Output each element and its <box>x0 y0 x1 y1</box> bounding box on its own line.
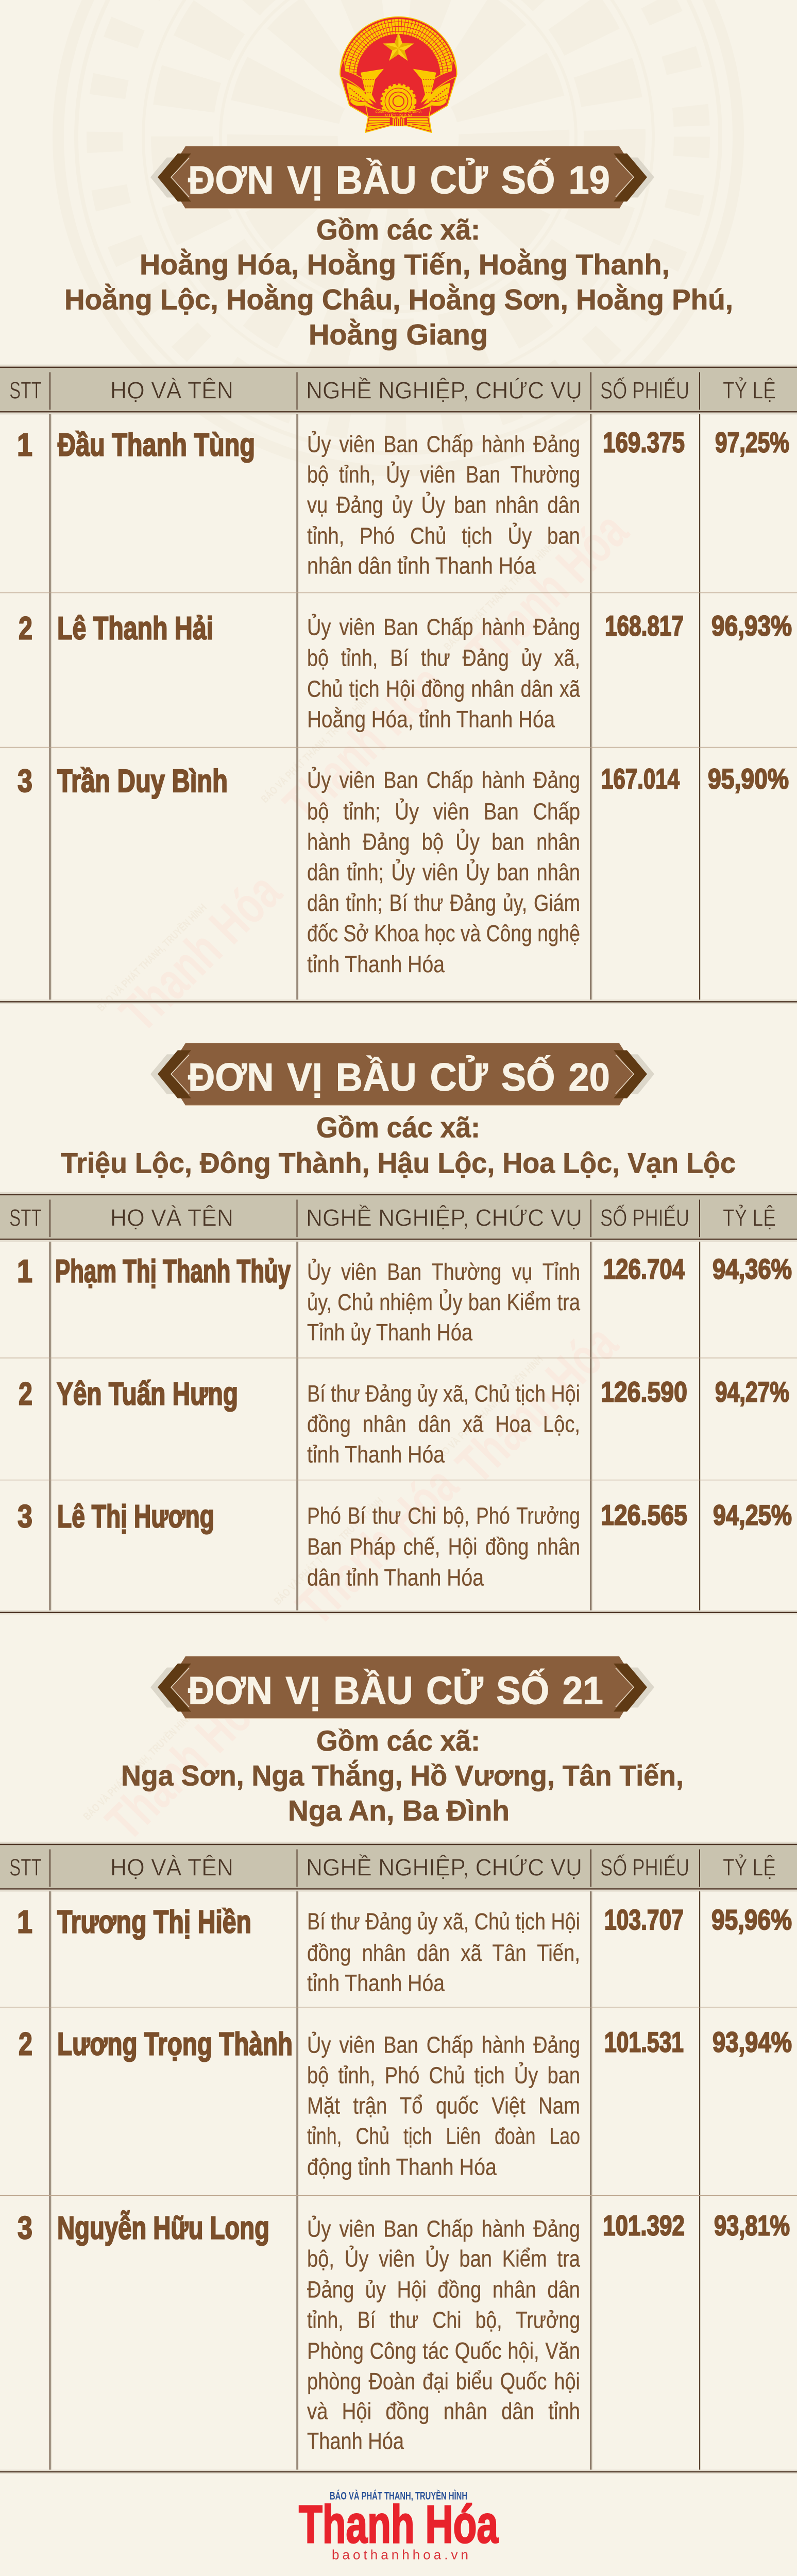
row: Phạm Thị Thanh Thủy: ủy, Chủ nhiệm Ủy ban Kiểm tra <box>307 1289 581 1315</box>
table header: NGHỀ NGHIỆP, CHỨC VỤ <box>306 1854 582 1881</box>
text block: communes of unit 19: Hoằng Hóa, Hoằng Tiến, Hoằng Thanh, <box>140 248 670 281</box>
table header: STT <box>9 1205 42 1231</box>
row: Phạm Thị Thanh Thủy: 1 <box>17 1253 32 1290</box>
row: Phạm Thị Thanh Thủy: Tỉnh ủy Thanh Hóa <box>307 1319 473 1346</box>
table header: STT <box>9 377 42 403</box>
text block: communes of unit 21 <box>121 1724 684 1826</box>
text block: communes of unit 19: Hoằng Giang <box>309 318 488 350</box>
text block: communes of unit 19: Gồm các xã: <box>316 213 480 246</box>
row: Lương Trọng Thành <box>19 2026 792 2180</box>
logo: Báo và Phát thanh, Truyền hình Thanh Hóa: baothanhhoa.vn <box>332 2548 468 2563</box>
table header: TỶ LỆ <box>723 377 776 403</box>
row: Lê Thị Hương: dân tỉnh Thanh Hóa <box>307 1565 484 1590</box>
banner: unit 19 title <box>150 146 654 209</box>
table header <box>0 365 797 415</box>
banner: unit 19 title: ĐƠN VỊ BẦU CỬ SỐ 19 <box>188 159 610 202</box>
row: Yên Tuấn Hưng: đồng nhân dân xã Hoa Lộc, <box>307 1411 580 1437</box>
icon: national emblem of Vietnam <box>340 17 457 132</box>
row: Đầu Thanh Tùng: Đầu Thanh Tùng <box>58 427 255 463</box>
row: Nguyễn Hữu Long: Phòng Công tác Quốc hội, Văn <box>307 2338 580 2364</box>
table: unit 21 results <box>0 1842 797 2473</box>
background: Thanh Hoa watermarks: Thanh Hóa <box>445 1314 629 1494</box>
table header: TỶ LỆ <box>723 1205 776 1231</box>
row: Yên Tuấn Hưng: tỉnh Thanh Hóa <box>307 1442 445 1468</box>
row: Đầu Thanh Tùng: vụ Đảng ủy Ủy ban nhân dân <box>307 492 580 518</box>
table header <box>0 1842 797 1892</box>
row: Đầu Thanh Tùng: nhân dân tỉnh Thanh Hóa <box>307 553 536 579</box>
banner: unit 21 title <box>150 1656 654 1719</box>
row: Nguyễn Hữu Long: tỉnh, Bí thư Chi bộ, Trưởng <box>307 2307 580 2333</box>
section: election unit 21 <box>0 1656 797 2473</box>
row: Yên Tuấn Hưng: Yên Tuấn Hưng <box>57 1376 238 1412</box>
row: Lê Thị Hương: 3 <box>18 1499 32 1534</box>
row: Trần Duy Bình: tỉnh Thanh Hóa <box>307 952 445 977</box>
text block: communes of unit 21: Gồm các xã: <box>316 1724 480 1757</box>
text block: communes of unit 20 <box>61 1111 736 1179</box>
row: Nguyễn Hữu Long: Nguyễn Hữu Long <box>57 2210 269 2246</box>
banner: unit 20 title: ĐƠN VỊ BẦU CỬ SỐ 20 <box>188 1056 610 1099</box>
row: Đầu Thanh Tùng: Ủy viên Ban Chấp hành Đảng <box>307 431 580 457</box>
row: Trần Duy Bình: bộ tỉnh; Ủy viên Ban Chấp <box>307 798 580 824</box>
banner: unit 20 title <box>150 1043 654 1106</box>
row: Trần Duy Bình: Trần Duy Bình <box>57 764 228 799</box>
row: Nguyễn Hữu Long: Thanh Hóa <box>307 2428 404 2454</box>
row: Lương Trọng Thành: Lương Trọng Thành <box>57 2026 293 2062</box>
text block: communes of unit 19: Hoằng Lộc, Hoằng Châu, Hoằng Sơn, Hoằng Phú, <box>64 283 733 315</box>
row: Lương Trọng Thành: 101.531 <box>604 2026 684 2058</box>
row: Đầu Thanh Tùng: tỉnh, Phó Chủ tịch Ủy ban <box>307 522 580 549</box>
row: Đầu Thanh Tùng: 169.375 <box>603 427 685 459</box>
logo: Báo và Phát thanh, Truyền hình Thanh Hóa: Thanh Hóa <box>299 2495 499 2554</box>
row: Trần Duy Bình: Ủy viên Ban Chấp hành Đảng <box>307 767 580 793</box>
background: Thanh Hoa watermarks: Thanh Hóa <box>285 1455 469 1636</box>
row: Đầu Thanh Tùng: 1 <box>17 427 32 463</box>
row: Trương Thị Hiền: Trương Thị Hiền <box>57 1904 251 1940</box>
row: Trương Thị Hiền: 1 <box>17 1904 32 1940</box>
table header: SỐ PHIẾU <box>600 377 689 403</box>
row: Lê Thanh Hải: bộ tỉnh, Bí thư Đảng ủy xã, <box>307 645 580 671</box>
row: Lê Thanh Hải: Hoằng Hóa, tỉnh Thanh Hóa <box>307 706 555 732</box>
text block: communes of unit 21: Nga Sơn, Nga Thắng, Hồ Vương, Tân Tiến, <box>121 1759 684 1792</box>
table header: TỶ LỆ <box>723 1854 776 1881</box>
logo: Báo và Phát thanh, Truyền hình Thanh Hóa <box>299 2489 499 2563</box>
table header: NGHỀ NGHIỆP, CHỨC VỤ <box>306 1205 582 1231</box>
row: Trương Thị Hiền: Bí thư Đảng ủy xã, Chủ tịch Hội <box>307 1908 580 1935</box>
background: Thanh Hoa watermarks: Thanh Hóa <box>455 501 639 682</box>
row: Phạm Thị Thanh Thủy: Phạm Thị Thanh Thủy <box>55 1253 291 1290</box>
row: Nguyễn Hữu Long: 3 <box>18 2210 32 2246</box>
row: Lê Thị Hương: Lê Thị Hương <box>57 1499 214 1534</box>
table header: HỌ VÀ TÊN <box>110 377 233 403</box>
row: Lê Thanh Hải: Ủy viên Ban Chấp hành Đảng <box>307 614 580 640</box>
row: Lê Thanh Hải: Lê Thanh Hải <box>57 611 213 646</box>
table header: STT <box>9 1854 42 1881</box>
row: Lê Thanh Hải: 168.817 <box>605 610 684 641</box>
row: Trần Duy Bình: 167.014 <box>601 763 680 794</box>
row: Lương Trọng Thành: 2 <box>19 2026 32 2062</box>
background: Thanh Hoa watermarks <box>81 496 639 1860</box>
row: Trương Thị Hiền: tỉnh Thanh Hóa <box>307 1970 445 1996</box>
background: Thanh Hoa watermarks: Thanh Hóa <box>273 653 456 834</box>
row: Lương Trọng Thành: động tỉnh Thanh Hóa <box>307 2154 497 2180</box>
row: Yên Tuấn Hưng: Bí thư Đảng ủy xã, Chủ tịch Hội <box>307 1381 580 1407</box>
row: Nguyễn Hữu Long: và Hội đồng nhân dân tỉnh <box>307 2398 580 2424</box>
row: Trương Thị Hiền: 103.707 <box>604 1904 684 1936</box>
row: Trương Thị Hiền <box>17 1904 792 1996</box>
row: Trương Thị Hiền: đồng nhân dân xã Tân Tiến, <box>307 1940 580 1966</box>
row: Đầu Thanh Tùng <box>17 427 789 579</box>
background: Thanh Hoa watermarks: BÁO VÀ PHÁT THANH, TRUYỀN HÌNH <box>431 1353 546 1466</box>
icon: national emblem of Vietnam: VIỆT NAM <box>384 113 413 118</box>
row: Phạm Thị Thanh Thủy: 126.704 <box>603 1253 685 1285</box>
background: Thanh Hoa watermarks: Thanh Hóa <box>95 1671 278 1851</box>
background: Thanh Hoa watermarks: BÁO VÀ PHÁT THANH, TRUYỀN HÌNH <box>259 693 373 805</box>
table header: SỐ PHIẾU <box>600 1205 689 1231</box>
row: Nguyễn Hữu Long: 101.392 <box>603 2210 685 2241</box>
background: Thanh Hoa watermarks: BÁO VÀ PHÁT THANH, TRUYỀN HÌNH <box>95 902 209 1014</box>
row: Lê Thanh Hải <box>19 610 792 732</box>
row: Lê Thị Hương: Ban Pháp chế, Hội đồng nhân <box>307 1534 580 1560</box>
row: Nguyễn Hữu Long: phòng Đoàn đại biểu Quốc hội <box>307 2368 580 2394</box>
row: Trần Duy Bình <box>18 763 789 977</box>
row: Phạm Thị Thanh Thủy <box>17 1253 792 1346</box>
table header: SỐ PHIẾU <box>600 1854 689 1881</box>
table: unit 19 results <box>0 365 797 1004</box>
row: Lương Trọng Thành: tỉnh, Chủ tịch Liên đoàn Lao <box>307 2123 580 2149</box>
table header: NGHỀ NGHIỆP, CHỨC VỤ <box>306 377 582 403</box>
row: Yên Tuấn Hưng <box>19 1376 789 1468</box>
row: Đầu Thanh Tùng: bộ tỉnh, Ủy viên Ban Thường <box>307 461 580 488</box>
row: Lương Trọng Thành: Ủy viên Ban Chấp hành Đảng <box>307 2031 580 2058</box>
row: Nguyễn Hữu Long <box>18 2210 790 2454</box>
row: Lương Trọng Thành: bộ tỉnh, Phó Chủ tịch Ủy ban <box>307 2062 580 2089</box>
table header: HỌ VÀ TÊN <box>110 1205 233 1231</box>
row: Trần Duy Bình: đốc Sở Khoa học và Công nghệ <box>307 921 580 946</box>
table header <box>0 1192 797 1242</box>
table header: HỌ VÀ TÊN <box>110 1854 233 1881</box>
background: Thanh Hoa watermarks: Thanh Hóa <box>109 862 292 1042</box>
background: Thanh Hoa watermarks: BÁO VÀ PHÁT THANH, TRUYỀN HÌNH <box>442 540 556 653</box>
text block: communes of unit 20: Gồm các xã: <box>316 1111 480 1143</box>
section: election unit 19 <box>0 146 797 1004</box>
row: Phạm Thị Thanh Thủy: Ủy viên Ban Thường vụ Tỉnh <box>307 1258 580 1285</box>
row: Nguyễn Hữu Long: Ủy viên Ban Chấp hành Đảng <box>307 2215 580 2242</box>
row: Nguyễn Hữu Long: bộ, Ủy viên Ủy ban Kiểm tra <box>307 2245 581 2272</box>
row: Lê Thanh Hải: Chủ tịch Hội đồng nhân dân xã <box>307 676 581 702</box>
banner: unit 21 title: ĐƠN VỊ BẦU CỬ SỐ 21 <box>188 1669 603 1713</box>
row: Lê Thanh Hải: 2 <box>19 611 32 646</box>
text block: communes of unit 19 <box>64 213 733 350</box>
logo: Báo và Phát thanh, Truyền hình Thanh Hóa: BÁO VÀ PHÁT THANH, TRUYỀN HÌNH <box>330 2489 467 2502</box>
text block: communes of unit 21: Nga An, Ba Đình <box>288 1794 510 1826</box>
table: unit 20 results <box>0 1192 797 1614</box>
row: Yên Tuấn Hưng: 126.590 <box>601 1376 687 1408</box>
background: Thanh Hoa watermarks: BÁO VÀ PHÁT THANH, TRUYỀN HÌNH <box>272 1495 386 1607</box>
background: bronze drum pattern <box>58 0 738 471</box>
icon: national emblem of Vietnam: CỘNG HÒA XÃ HỘI CHỦ NGHĨA <box>375 109 422 114</box>
background: Thanh Hoa watermarks: BÁO VÀ PHÁT THANH, TRUYỀN HÌNH <box>81 1710 195 1822</box>
row: Lê Thị Hương <box>18 1499 792 1590</box>
row: Trần Duy Bình: hành Đảng bộ Ủy ban nhân <box>307 828 580 855</box>
row: Lê Thị Hương: Phó Bí thư Chi bộ, Phó Trưởng <box>307 1503 580 1529</box>
row: Trần Duy Bình: dân tỉnh; Ủy viên Ủy ban nhân <box>307 859 580 885</box>
row: Lương Trọng Thành: Mặt trận Tổ quốc Việt Nam <box>307 2093 580 2119</box>
text block: communes of unit 20: Triệu Lộc, Đông Thành, Hậu Lộc, Hoa Lộc, Vạn Lộc <box>61 1147 736 1179</box>
row: Trần Duy Bình: dân tỉnh; Bí thư Đảng ủy, Giám <box>307 890 580 916</box>
row: Lê Thị Hương: 126.565 <box>601 1499 687 1531</box>
row: Nguyễn Hữu Long: Đảng ủy Hội đồng nhân dân <box>307 2277 580 2302</box>
row: Trần Duy Bình: 3 <box>18 764 32 799</box>
section: election unit 20 <box>0 1043 797 1614</box>
row: Yên Tuấn Hưng: 2 <box>19 1376 32 1412</box>
